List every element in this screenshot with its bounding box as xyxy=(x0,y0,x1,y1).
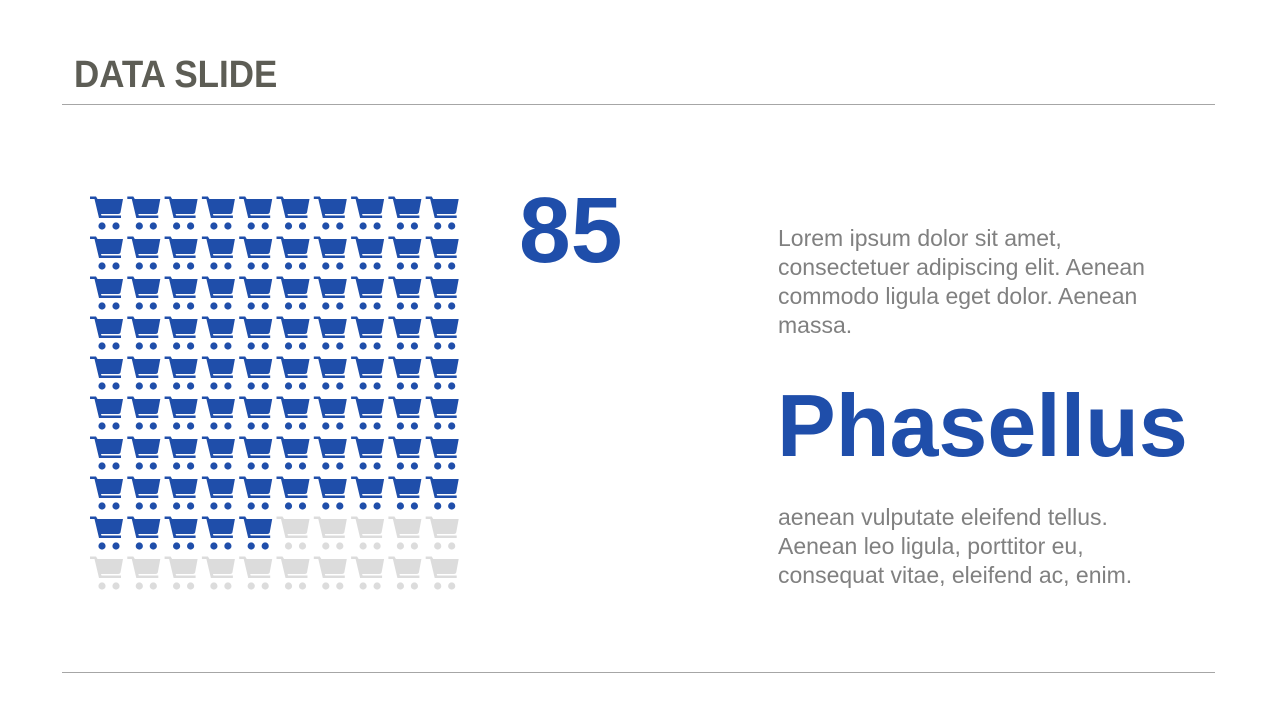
big number: 85 xyxy=(519,178,622,282)
chart: cart icon grid xyxy=(90,196,459,590)
text block top: Lorem ipsum dolor sit amet, consectetuer adipiscing elit. Aenean commodo ligula eget dolor. Aenean massa. xyxy=(778,225,1145,338)
heading: Phasellus: Phasellus xyxy=(777,376,1188,475)
text block bottom: aenean vulputate eleifend tellus. Aenean leo ligula, porttitor eu, consequat vitae, eleifend ac, enim. xyxy=(778,504,1132,588)
title: DATA SLIDE xyxy=(74,54,277,96)
